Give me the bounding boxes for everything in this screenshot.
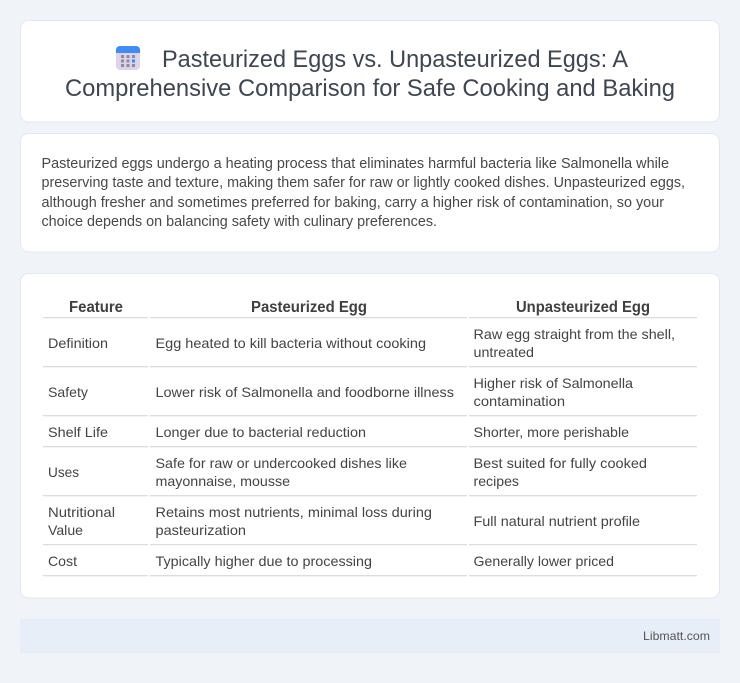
title: Comprehensive Comparison for Safe Cooking and Baking — [65, 75, 675, 102]
row: safety: Safety — [48, 384, 88, 400]
panel: title card — [20, 20, 720, 122]
row: shelf life — [48, 424, 629, 440]
text block: introduction: preserving taste and texture, making them safer for raw or lightly cooked dishes. Unpasteurized eggs, — [42, 175, 685, 191]
row: uses: mayonnaise, mousse — [156, 473, 290, 489]
text block: introduction: although fresher and sometimes preferred for baking, carry a higher risk of contamination, so your — [42, 195, 664, 211]
row: uses: Best suited for fully cooked — [474, 455, 647, 471]
row: nutritional value: Retains most nutrients, minimal loss during — [156, 504, 432, 520]
table header: Feature — [69, 299, 123, 316]
row: shelf life: Shorter, more perishable — [474, 424, 629, 440]
row: nutritional value: Nutritional — [48, 504, 115, 520]
text block: introduction: choice depends on balancing safety with culinary preferences. — [42, 214, 437, 230]
row: uses — [48, 455, 647, 489]
row: cost — [48, 553, 614, 569]
title — [65, 46, 675, 102]
row: definition: Raw egg straight from the shell, — [474, 326, 675, 342]
text block: introduction: Pasteurized eggs undergo a heating process that eliminates harmful bacteria like Salmonella while — [42, 156, 669, 172]
row: nutritional value: Full natural nutrient profile — [474, 513, 640, 529]
row: nutritional value: pasteurization — [156, 522, 246, 538]
row: cost: Typically higher due to processing — [156, 553, 372, 569]
row: uses: Uses — [48, 464, 79, 480]
table header: Pasteurized Egg — [251, 299, 367, 316]
row: safety: Higher risk of Salmonella — [474, 375, 633, 391]
row: definition — [48, 326, 675, 360]
row: shelf life: Shelf Life — [48, 424, 108, 440]
row: nutritional value — [48, 504, 640, 538]
row: shelf life: Longer due to bacterial reduction — [156, 424, 366, 440]
row: safety: Lower risk of Salmonella and foodborne illness — [156, 384, 454, 400]
title: Pasteurized Eggs vs. Unpasteurized Eggs: A — [162, 46, 628, 73]
panel: comparison table — [20, 274, 720, 598]
row: cost: Generally lower priced — [474, 553, 614, 569]
row: uses: Safe for raw or undercooked dishes like — [156, 455, 407, 471]
row: uses: recipes — [474, 473, 519, 489]
row: definition: untreated — [474, 344, 534, 360]
row: definition: Definition — [48, 335, 108, 351]
panel: introduction — [20, 134, 720, 252]
table header — [69, 299, 650, 316]
icon: calendar — [116, 46, 140, 70]
row: safety — [48, 375, 633, 409]
row: nutritional value: Value — [48, 522, 83, 538]
row: definition: Egg heated to kill bacteria without cooking — [156, 335, 426, 351]
row: cost: Cost — [48, 553, 77, 569]
panel: footer — [20, 619, 720, 653]
row: safety: contamination — [474, 393, 565, 409]
table header: Unpasteurized Egg — [516, 299, 650, 316]
text block: introduction — [42, 156, 685, 230]
footer credit: Libmatt.com — [643, 629, 710, 643]
